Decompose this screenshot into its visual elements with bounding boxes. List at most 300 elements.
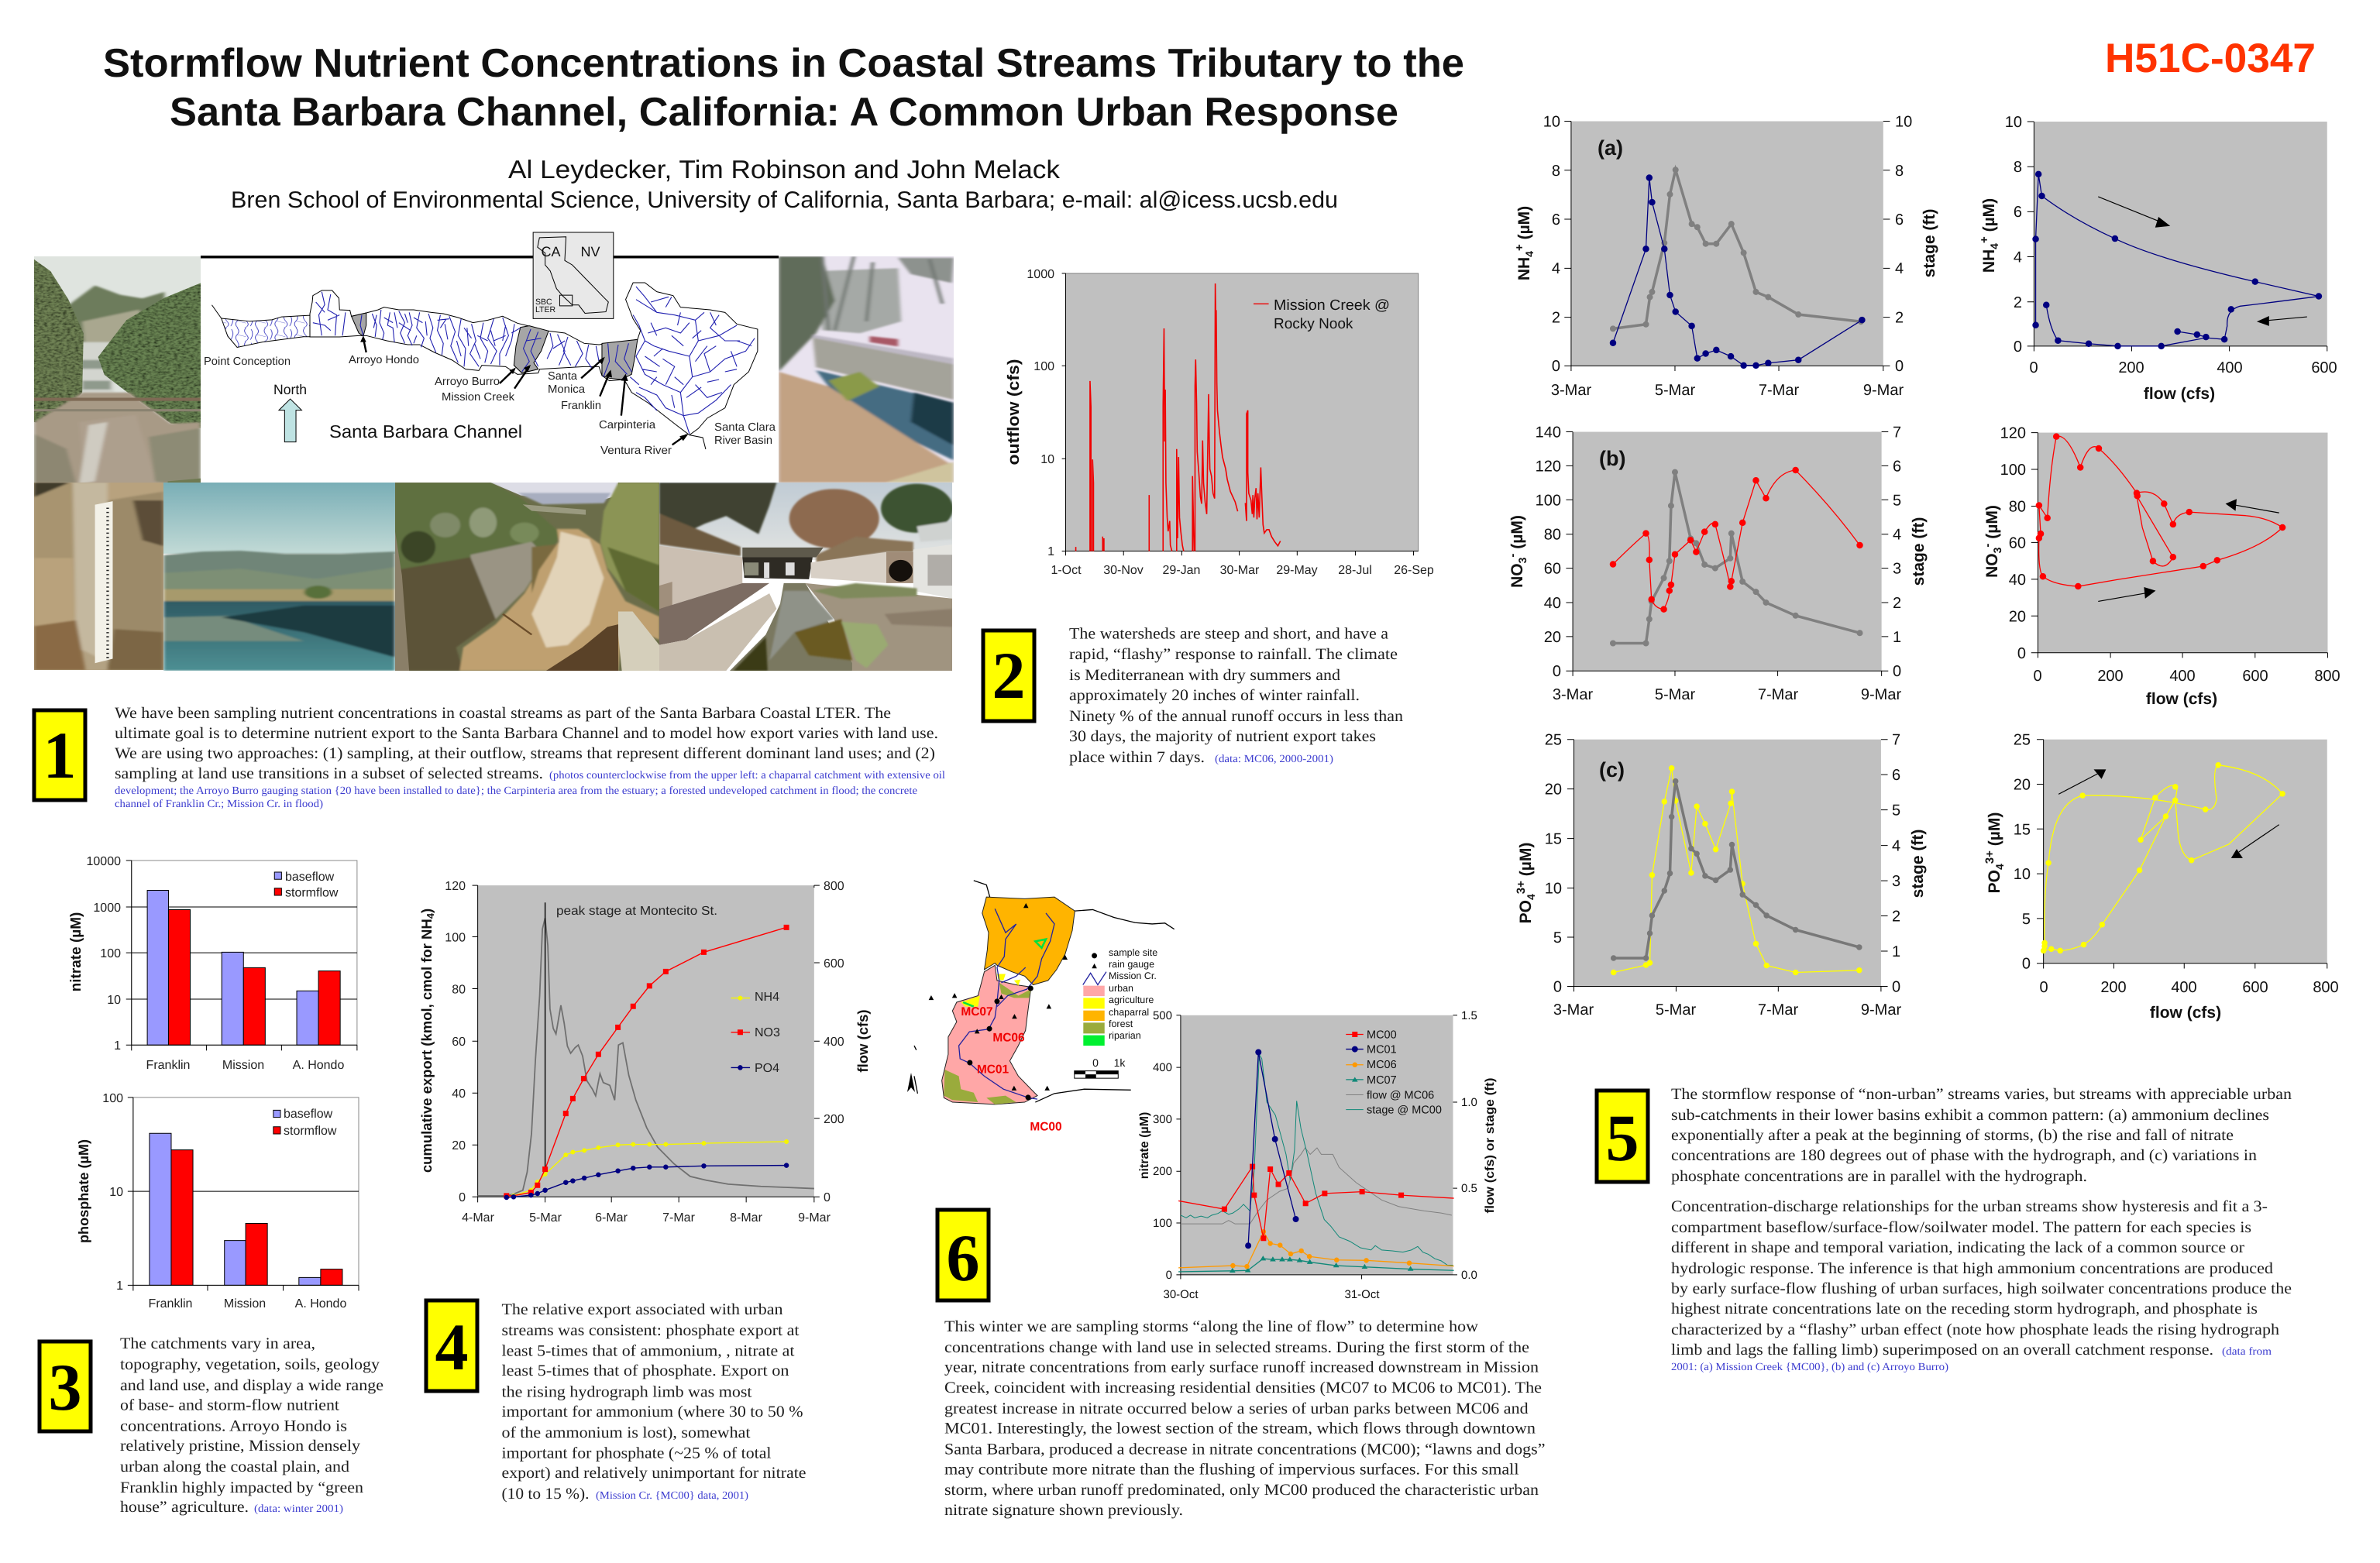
chart (b): nitrate time series: 7 [1893,424,1901,441]
panel 4 text: important for ammonium (where 30 to 50 % [502,1403,803,1420]
California inset [533,232,614,318]
gauged sub-basins [352,313,638,380]
panel 4 text: least 5-times that of phosphate. Export on [502,1362,789,1379]
panel 4 text: important for phosphate (~25 % of total [502,1445,772,1462]
urban lower basin [942,965,1037,1104]
panel 5 text: phosphate concentrations are in parallel with the hydrograph. [1671,1168,2087,1185]
chaparral upper basin [982,897,1075,985]
panel 6 text: greatest increase in nitrate occurred below a series of urban parks between MC06 and [944,1400,1529,1417]
panel 3 text: house” agriculture. [120,1499,249,1516]
chart (c): phosphate time series: 3+ [1515,881,1528,894]
panel 4 text: (Mission Cr. {MC00} data, 2001) [596,1490,748,1502]
panel 1 text: (photos counterclockwise from the upper left: a chaparral catchment with extensive oil [549,770,945,782]
photo: chaparral catchment with oil development [34,256,201,483]
chart: Mission Creek outflow hydrograph: 100 [1034,360,1054,373]
chart: cumulative export: ) [418,909,435,913]
flow series [1076,283,1281,551]
panel 2 text: approximately 20 inches of winter rainfall. [1069,687,1360,704]
chart: cumulative export: NH4 [755,991,779,1004]
panel 2 text: place within 7 days. [1069,749,1205,766]
chart (c): phosphate time series: 3-Mar [1553,1001,1594,1019]
chart (c): phosphate time series: 7 [1892,732,1900,749]
chart (a): ammonium time series: + [1513,244,1526,251]
panel 3 text: The catchments vary in area, [120,1335,315,1352]
chart: ammonium versus flow: 4 [1988,243,2000,249]
chart: cumulative export: cumulative export (kmol, cmol for NH [418,919,435,1173]
chart: nitrate along the line of flow: nitrate (µM) [1138,1112,1151,1179]
chart (c): phosphate time series: stage (ft) [1909,830,1927,898]
panel 2 text: 30 days, the majority of nutrient export takes [1069,728,1376,745]
panel: photo and map collage [34,232,954,671]
chart: phosphate versus flow: 5 [2022,911,2031,928]
flow hydrograph [478,918,814,1196]
chart: Mission Creek outflow hydrograph: Rocky Nook [1274,316,1353,332]
photo: Carpinteria estuary [163,483,395,671]
panel 3 text: (data: winter 2001) [254,1503,343,1515]
chart (b): nitrate time series: 140 [1536,424,1561,441]
chart (a): ammonium time series: 4 [1895,260,1904,277]
chart (c): phosphate time series: 2 [1892,908,1900,925]
map: Santa Barbara coastal watersheds: River Basin [714,435,772,447]
chart: nitrate bars: 10000 [87,855,121,868]
chart: phosphate versus flow: 200 [2100,979,2127,996]
title: Santa Barbara Channel, California: A Common Urban Response [170,90,1398,135]
chart: phosphate bars: Mission [224,1297,266,1311]
chart: nitrate bars: stormflow [285,886,339,900]
panel 6 text: concentrations change with land use in selected streams. During the first storm of the [944,1339,1529,1356]
chart: cumulative export: 0 [824,1191,831,1204]
chart (b): nitrate time series: 3-Mar [1553,686,1593,703]
chart: cumulative export: 8-Mar [730,1211,763,1225]
chart: cumulative export: 200 [824,1113,844,1126]
panel 3 text: concentrations. Arroyo Hondo is [120,1417,347,1434]
chart: nitrate along the line of flow: 31-Oct [1344,1288,1380,1301]
panel 2 text [1069,626,1403,766]
chart: nitrate versus flow: 100 [2000,462,2026,479]
chart (b): nitrate time series: 3 [1893,561,1901,578]
location leaders [363,338,686,445]
north arrow [279,399,301,442]
stage series [1614,782,1859,958]
map: Santa Barbara coastal watersheds: Mission Creek [442,391,515,404]
map: Santa Barbara coastal watersheds: Santa Barbara Channel [329,421,522,441]
map: Mission Creek land use: sample site [1109,947,1157,958]
chart: ammonium versus flow [1978,114,2337,403]
chart: phosphate bars: Franklin [149,1297,192,1311]
chart: nitrate versus flow: 200 [2097,668,2124,685]
map: Santa Barbara coastal watersheds: SBC [535,297,552,307]
chart: phosphate versus flow: (µM) [1986,812,2003,850]
chart: ammonium versus flow: + [1978,236,1991,243]
scale bar [1075,1071,1118,1078]
map: Santa Barbara coastal watersheds: Carpinteria [599,419,656,431]
chart: Mission Creek outflow hydrograph: 29-May [1276,564,1318,577]
chart: nitrate bars: Mission [222,1059,264,1072]
panel 4 text: The relative export associated with urban [502,1301,782,1318]
chart: nitrate along the line of flow: 0.5 [1461,1182,1477,1195]
chart: cumulative export: 7-Mar [662,1211,696,1225]
authors: Al Leydecker, Tim Robinson and John Melack [508,155,1061,184]
panel 2 text: The watersheds are steep and short, and have a [1069,626,1388,643]
chart (b): nitrate time series: 0 [1553,663,1561,680]
chart: cumulative export: 5-Mar [529,1211,562,1225]
chart (b): nitrate time series: 5 [1893,492,1901,509]
chart (a): ammonium time series: NH [1515,257,1533,280]
chart: nitrate along the line of flow: 300 [1153,1113,1172,1126]
chart: phosphate versus flow: 800 [2313,979,2339,996]
panel 1 text: channel of Franklin Cr.; Mission Cr. in flood) [115,799,323,810]
chart: nitrate along the line of flow: 0 [1166,1269,1172,1282]
chart: phosphate bars: stormflow [284,1125,337,1138]
map: Mission Creek land use: 1k [1114,1056,1126,1069]
chart (b): nitrate time series: stage (ft) [1910,517,1928,586]
chart (a): ammonium time series: 4 [1523,251,1536,257]
chart (b): nitrate time series: 9-Mar [1861,686,1901,703]
chart: phosphate bars [76,1092,359,1311]
panel 2 text: is Mediterranean with dry summers and [1069,667,1340,684]
chart: nitrate versus flow: - [1981,544,1994,548]
chart (b): nitrate time series: 80 [1544,527,1561,544]
map: Mission Creek land use [907,881,1175,1134]
chart: phosphate versus flow: 400 [2171,979,2197,996]
chart (b): nitrate time series: 1 [1893,629,1901,646]
chart: phosphate versus flow: 0 [2039,979,2048,996]
chart: cumulative export: 60 [452,1036,466,1049]
panel 3 text: topography, vegetation, soils, geology [120,1356,380,1373]
chart: nitrate along the line of flow: 30-Oct [1163,1288,1199,1301]
panel 5 text: exponentially after a peak at the beginning of storms, (b) the rise and fall of nitrate [1671,1127,2234,1144]
panel 1 text: development; the Arroyo Burro gauging station {20 have been installed to date}; the Carpinteria area from the estuary; a forested undeveloped catchment in flood; the concrete [115,785,917,797]
panel 5 text: sub-catchments in their lower basins exhibit a common pattern: (a) ammonium declines [1671,1107,2269,1124]
chart (c): phosphate time series: PO [1517,900,1535,923]
chart: nitrate versus flow: 20 [2009,608,2026,625]
panel 5 text [1671,1086,2292,1373]
panel 4 number box [426,1300,477,1391]
chart: nitrate bars: nitrate (µM) [68,912,84,991]
direction arrows [2098,197,2307,326]
chart (c): phosphate time series: 4 [1892,838,1900,855]
direction arrows [2098,499,2279,601]
chart: Mission Creek outflow hydrograph: 1-Oct [1051,564,1082,577]
stage series [1613,472,1860,644]
chart: ammonium versus flow: (µM) [1980,198,1998,236]
chart: cumulative export [418,880,871,1225]
panel 3 text: of base- and storm-flow nutrient [120,1397,339,1414]
chart: cumulative export: 4-Mar [462,1211,495,1225]
map: Santa Barbara coastal watersheds: NV [580,244,600,259]
chart (b): nitrate time series: (b) [1599,447,1625,470]
chart (c): phosphate time series: (c) [1599,758,1625,782]
map: Santa Barbara coastal watersheds: Monica [548,383,586,396]
chart: nitrate along the line of flow: MC06 [1367,1059,1397,1071]
chart: nitrate versus flow: 60 [2009,534,2026,551]
map: Santa Barbara coastal watersheds: North [273,382,307,397]
chart (a): ammonium time series: 2 [1895,310,1904,327]
chart: nitrate bars: Franklin [146,1059,190,1072]
chart: nitrate versus flow: 120 [2000,425,2026,442]
chart (c): phosphate time series: 10 [1545,881,1562,898]
map: Mission Creek land use: MC06 [992,1032,1025,1044]
map: Mission Creek land use: 0 [1092,1056,1099,1069]
chart: phosphate versus flow: 3+ [1983,850,1997,864]
panel 5 text: Concentration-discharge relationships for the urban streams show hysteresis and fit a 3- [1671,1198,2268,1215]
chart (a): ammonium time series [1513,113,1938,399]
chart (b): nitrate time series: 100 [1536,492,1561,509]
chart: cumulative export: NO3 [755,1026,780,1039]
panel 2 text: (data: MC06, 2000-2001) [1215,754,1333,765]
panel 1 text: We are using two approaches: (1) sampling, at their outflow, streams that represent different dominant land uses; and (2) [115,745,935,762]
chart: cumulative export: 600 [824,957,844,970]
chart: cumulative export: 120 [445,880,466,893]
chart: nitrate bars: 1 [114,1039,121,1053]
chart (a): ammonium time series: 6 [1895,211,1904,228]
chart: nitrate versus flow: flow (cfs) [2146,690,2217,708]
chart (c): phosphate time series: 9-Mar [1861,1001,1901,1019]
chart: cumulative export: 800 [824,880,844,893]
chart: cumulative export: 400 [824,1036,844,1049]
sample sites [970,956,1095,1098]
chart: nitrate along the line of flow: 1.5 [1461,1009,1477,1022]
map: Mission Creek land use: Mission Cr. [1109,970,1157,981]
chart: nitrate along the line of flow: 400 [1153,1061,1172,1074]
chart: nitrate along the line of flow: MC07 [1367,1074,1397,1087]
direction arrows [2058,769,2279,858]
chart (a): ammonium time series: (a) [1598,136,1623,160]
chart (a): ammonium time series: 7-Mar [1759,382,1799,399]
panel 4 text: streams was consistent: phosphate export at [502,1322,800,1339]
chart (a): ammonium time series: 8 [1552,163,1560,180]
stage series [1613,170,1861,328]
panel 5 text: concentrations are 180 degrees out of phase with the hydrograph, and (c) variations in [1671,1147,2257,1164]
panel 4 text: of the ammonium is lost), somewhat [502,1424,751,1441]
map: Santa Barbara coastal watersheds: Point Conception [204,356,291,368]
chart (b): nitrate time series: - [1506,554,1519,558]
chart (c): phosphate time series: 5-Mar [1656,1001,1696,1019]
chart: nitrate bars: 1000 [93,902,121,915]
chart: phosphate bars: A. Hondo [295,1297,346,1311]
chart (b): nitrate time series: 60 [1544,561,1561,578]
chart: phosphate bars: baseflow [284,1108,333,1121]
chart: nitrate along the line of flow: 1.0 [1461,1096,1477,1109]
panel 4 text: least 5-times that of ammonium, , nitrate at [502,1343,795,1360]
chart: Mission Creek outflow hydrograph: 1000 [1027,268,1054,281]
panel 4 text: export) and relatively unimportant for nitrate [502,1465,806,1482]
chart: nitrate along the line of flow: flow (cfs) or stage (ft) [1484,1077,1497,1214]
panel 4 text: (10 to 15 %). [502,1486,589,1503]
chart (a): ammonium time series: 9-Mar [1863,382,1904,399]
chart: phosphate bars: phosphate (µM) [76,1139,91,1243]
chart: phosphate versus flow [1983,732,2339,1022]
chart: phosphate versus flow: PO [1986,870,2003,893]
chart (b): nitrate time series [1506,424,1928,703]
panel 3 number box [40,1341,91,1431]
chart: ammonium versus flow: 0 [2014,338,2022,356]
chart: Mission Creek outflow hydrograph: outflow (cfs) [1005,359,1023,465]
chart: Mission Creek outflow hydrograph: 29-Jan [1163,564,1200,577]
chart: cumulative export: flow (cfs) [855,1009,871,1073]
map: Santa Barbara coastal watersheds: Franklin [561,400,601,412]
photo: Arroyo Burro gauging station [34,483,163,670]
chart: cumulative export: 40 [452,1087,466,1101]
photo: forested catchment in flood [395,483,659,671]
chart (b): nitrate time series: 6 [1893,458,1901,475]
stream network [313,287,755,434]
chart: nitrate bars: 100 [100,947,121,960]
panel 6 text [944,1318,1545,1519]
panel 3 text: relatively pristine, Mission densely [120,1438,361,1455]
chart: Mission Creek outflow hydrograph: 30-Nov [1103,564,1144,577]
chart: nitrate bars [68,855,357,1072]
chart (b): nitrate time series: (µM) [1508,515,1526,554]
panel 5 number box: 5 [1605,1101,1639,1175]
panel 4 text [502,1301,806,1503]
panel 6 text: may contribute more nitrate than the flushing of impervious surfaces. For this small [944,1461,1519,1478]
chart (b): nitrate time series: 4 [1893,527,1901,544]
chart: nitrate along the line of flow: stage @ MC00 [1367,1104,1442,1117]
panel 3 text: and land use, and display a wide range [120,1377,383,1394]
chart (a): ammonium time series: 5-Mar [1655,382,1695,399]
chart: phosphate versus flow: 20 [2014,776,2031,793]
chart: nitrate versus flow: 40 [2009,572,2026,589]
chart (b): nitrate time series: 120 [1536,458,1561,475]
map: Mission Creek land use: rain gauge [1109,959,1154,970]
photo: concrete channel of Franklin Creek [659,483,952,671]
panel 5 text: The stormflow response of “non-urban” streams varies, but streams with appreciable urban [1671,1086,2292,1103]
ammonium series [507,998,786,1197]
chart (a): ammonium time series: 0 [1895,358,1904,375]
panel 1 number box: 1 [43,718,76,792]
chart: nitrate along the line of flow: MC00 [1367,1029,1397,1041]
chart: nitrate versus flow: 800 [2314,668,2340,685]
chart: phosphate versus flow: 600 [2242,979,2268,996]
map: Santa Barbara coastal watersheds: LTER [535,305,555,314]
chart (c): phosphate time series: 4 [1525,894,1537,900]
chart: cumulative export: 80 [452,984,466,996]
photo: Mission Creek in flood [779,256,954,483]
chart (c): phosphate time series: 5 [1892,802,1900,819]
chart: Mission Creek outflow hydrograph: 26-Sep [1394,564,1434,577]
chart (b): nitrate time series: 3 [1516,557,1529,563]
chart: nitrate along the line of flow: 100 [1153,1217,1172,1230]
ammonium series [1613,177,1862,366]
hysteresis loop [2039,436,2282,586]
chart: cumulative export: 100 [445,931,466,944]
map: Mission Creek land use: agriculture [1109,994,1154,1005]
nitrate series [1613,470,1860,610]
chart (c): phosphate time series: 0 [1553,979,1562,996]
panel 2 text: Ninety % of the annual runoff occurs in less than [1069,708,1403,725]
map: Mission Creek land use: urban [1109,983,1133,994]
chart: cumulative export: PO4 [755,1062,779,1075]
chart (a): ammonium time series: 10 [1895,113,1912,130]
chart (a): ammonium time series: 0 [1552,358,1560,375]
chart: ammonium versus flow: 0 [2029,359,2038,376]
panel 5 text: compartment baseflow/surface-flow/soilwater model. The pattern for each species is [1671,1219,2251,1236]
panel 5 text: characterized by a “flashy” urban effect (note how phosphate leads the rising hydrograph [1671,1321,2279,1338]
map: Mission Creek land use: chaparral [1109,1007,1149,1018]
map: Santa Barbara coastal watersheds: Arroyo Burro [435,376,500,388]
chart: nitrate versus flow: 3 [1991,547,2003,553]
chart (a): ammonium time series: 6 [1552,211,1560,228]
Mission Creek channels [959,909,1054,1099]
chart: cumulative export: 9-Mar [798,1211,831,1225]
map: Mission Creek land use: MC07 [961,1005,993,1019]
chart: nitrate bars: A. Hondo [293,1059,344,1072]
panel 6 text: storm, where urban runoff predominated, only MC00 produced the characteristic urban [944,1482,1539,1499]
chart: ammonium versus flow: 8 [2014,159,2022,176]
chart: phosphate versus flow: 15 [2014,821,2031,838]
chart (b): nitrate time series: 0 [1893,663,1901,680]
chart (a): ammonium time series: stage (ft) [1921,209,1938,277]
chart: nitrate bars: baseflow [285,871,335,884]
phosphate series [1614,768,1859,972]
chart: Mission Creek outflow hydrograph [1005,268,1434,577]
panel 6 text: nitrate signature shown previously. [944,1502,1183,1519]
chart: nitrate versus flow: 0 [2033,668,2042,685]
panel 5 text: (data from [2222,1346,2272,1358]
panel 1 number box [34,710,85,800]
chart: nitrate versus flow: 400 [2169,668,2196,685]
MC00 series [1178,1035,1454,1238]
chart (c): phosphate time series: 6 [1892,767,1900,784]
title [103,41,1464,135]
chart: Mission Creek outflow hydrograph: 10 [1040,453,1054,466]
chart (c): phosphate time series: 5 [1553,929,1562,946]
chart: Mission Creek outflow hydrograph: Mission Creek @ [1274,297,1390,314]
map: Mission Creek land use: MC01 [977,1063,1009,1077]
chart: ammonium versus flow: 200 [2118,359,2144,376]
map: Mission Creek land use: riparian [1109,1030,1141,1041]
map: Santa Barbara coastal watersheds: Santa Clara [714,421,776,434]
chart (a): ammonium time series: (µM) [1515,206,1533,244]
chart (b): nitrate time series: NO [1508,563,1526,588]
chart: nitrate along the line of flow: 500 [1153,1009,1172,1022]
chart: ammonium versus flow: flow (cfs) [2144,385,2215,403]
panel 6 text: MC01. Interestingly, the lowest section of the stream, which flows through downtown [944,1420,1536,1438]
panel 5 text: limb and lags the falling limb) superimposed on an overall catchment response. [1671,1341,2213,1359]
chart (c): phosphate time series: 25 [1545,732,1562,749]
panel 6 text: This winter we are sampling storms “along the line of flow” to determine how [944,1318,1478,1335]
chart: nitrate versus flow: 80 [2009,499,2026,516]
chart: nitrate along the line of flow: 200 [1153,1165,1172,1178]
panel 3 text [120,1335,383,1516]
chart: cumulative export: 0 [459,1191,466,1204]
flow trace [1181,1148,1452,1224]
chart: cumulative export: 4 [425,912,436,919]
panel 6 text: year, nitrate concentrations from early surface runoff increased downstream in Mission [944,1359,1539,1376]
map: Santa Barbara coastal watersheds: CA [541,244,561,259]
chart: nitrate versus flow: 0 [2017,645,2026,662]
panel 2 number box [983,630,1034,721]
chart: ammonium versus flow: 600 [2311,359,2337,376]
chart: nitrate versus flow: NO [1983,553,2001,578]
panel 5 text: different in shape and temporal variation, indicating the lack of a common source or [1671,1239,2244,1256]
panel 1 text: sampling at land use transitions in a subset of selected streams. [115,765,543,782]
panel 3 number box: 3 [48,1350,82,1424]
chart: nitrate bars: 10 [107,994,121,1007]
chart: nitrate along the line of flow: MC01 [1367,1044,1397,1056]
chart: phosphate versus flow: 4 [1993,864,2006,870]
chart: ammonium versus flow: 4 [2014,249,2022,266]
chart: Mission Creek outflow hydrograph: 30-Mar [1220,564,1260,577]
legend swatches [1083,972,1106,1046]
rain gauges [929,903,1097,1091]
stage trace [1181,1054,1453,1265]
panel 4 text: the rising hydrograph limb was most [502,1383,752,1400]
map: Mission Creek land use: forest [1109,1019,1133,1029]
panel 5 text: hydrologic response. The inference is that high ammonium concentrations are produced [1671,1260,2273,1277]
chart (c): phosphate time series: 20 [1545,782,1562,799]
